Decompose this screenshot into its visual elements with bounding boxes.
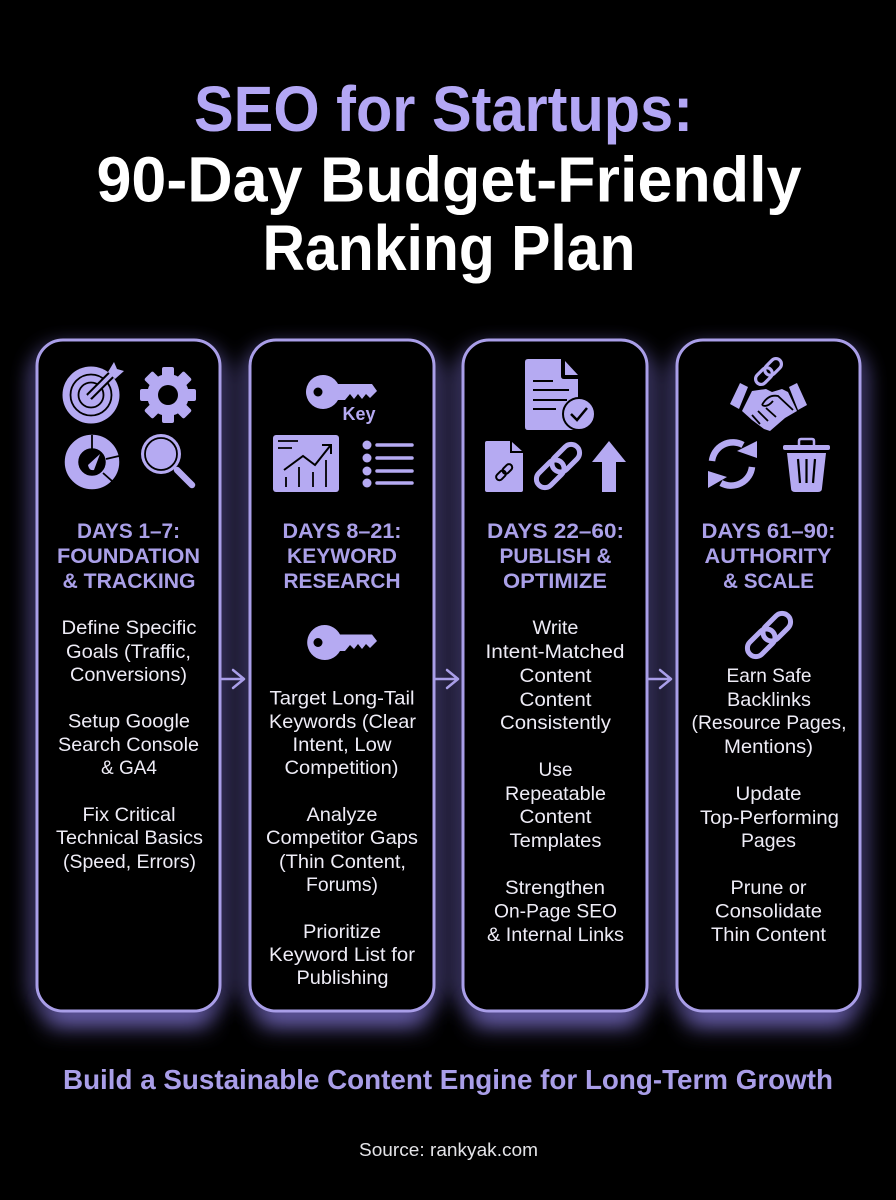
heading: days 22-60: OPTIMIZE <box>503 569 607 593</box>
text: days 8-21 tasks: Publishing <box>296 967 388 989</box>
text: days 61-90 tasks: Top-Performing <box>700 807 839 829</box>
icon: chain link <box>533 441 583 491</box>
text: days 8-21 tasks: Analyze <box>306 804 378 826</box>
heading: days 8-21: RESEARCH <box>284 569 400 593</box>
icon: document with check <box>525 359 595 430</box>
heading: days 61-90: & SCALE <box>723 569 814 593</box>
text: days 22-60 tasks: Consistently <box>500 712 611 734</box>
heading: days 22-60 <box>487 519 624 593</box>
text: days 22-60 tasks: Strengthen <box>505 877 605 899</box>
icon: up arrow <box>592 441 626 492</box>
text: days 1-7 tasks: Define Specific <box>62 617 197 639</box>
icon: document with link <box>485 441 523 492</box>
text: days 1-7 tasks: Goals (Traffic, <box>66 641 191 663</box>
heading: days 61-90: AUTHORITY <box>704 544 832 568</box>
text: days 61-90 tasks: Backlinks <box>727 689 811 711</box>
panel: days 22-60 <box>463 340 647 1011</box>
icon: gauge donut <box>72 435 119 482</box>
text: days 22-60 tasks: On-Page SEO <box>494 900 617 922</box>
source: Source: rankyak.com <box>359 1140 538 1160</box>
text: days 1-7 tasks: Fix Critical <box>82 804 176 826</box>
text: days 1-7 tasks: Setup Google <box>68 710 190 732</box>
text: days 61-90 tasks: (Resource Pages, <box>692 712 846 734</box>
icon: analytics chart <box>273 435 339 492</box>
text: days 8-21 tasks: Competition) <box>284 757 398 779</box>
heading: days 1-7: DAYS 1–7: <box>77 519 180 543</box>
text: days 8-21 tasks: Keywords (Clear <box>269 711 417 733</box>
text: days 61-90 tasks: Consolidate <box>715 900 822 922</box>
text: days 22-60 tasks <box>486 617 624 946</box>
panel: days 8-21 <box>250 340 434 1011</box>
text: days 22-60 tasks: Content <box>520 689 592 711</box>
text: days 61-90 tasks <box>692 665 846 946</box>
text: days 1-7 tasks: (Speed, Errors) <box>63 851 196 873</box>
text: days 22-60 tasks: & Internal Links <box>487 924 624 946</box>
text: days 22-60 tasks: Intent-Matched <box>486 641 624 663</box>
text: days 22-60 tasks: Content <box>520 665 592 687</box>
title: SEO for Startups: <box>194 73 693 145</box>
text: days 61-90 tasks: Update <box>736 783 802 805</box>
icon: refresh arrows <box>708 441 757 488</box>
icon: chain link <box>744 610 794 660</box>
heading: days 8-21: DAYS 8–21: <box>282 519 402 543</box>
text: days 61-90 tasks: Thin Content <box>711 924 827 946</box>
tagline: Build a Sustainable Content Engine for Long-Term Growth <box>63 1064 833 1095</box>
panel: days 61-90 <box>677 340 860 1011</box>
text: days 8-21 tasks: Prioritize <box>303 921 381 943</box>
text: days 8-21 tasks: Competitor Gaps <box>266 827 418 849</box>
icon: key <box>307 625 377 660</box>
icon: gear <box>140 367 196 423</box>
text: days 8-21 tasks: Intent, Low <box>292 734 392 756</box>
text: days 8-21 tasks: Target Long-Tail <box>270 688 414 710</box>
heading: days 61-90: DAYS 61–90: <box>702 519 836 543</box>
heading: days 1-7 <box>57 519 200 593</box>
icon: small chain link <box>753 356 784 387</box>
text: days 1-7 tasks: Conversions) <box>70 664 187 686</box>
text: days 61-90 tasks: Mentions) <box>724 736 813 758</box>
text: days 61-90 tasks: Earn Safe <box>726 665 812 687</box>
icon: key with label: Key <box>342 404 376 424</box>
text: days 8-21 tasks: (Thin Content, <box>279 851 406 873</box>
text: days 1-7 tasks: Technical Basics <box>56 827 203 849</box>
text: days 1-7 tasks: Search Console <box>58 734 199 756</box>
arrow: step 3 to 4 <box>648 670 671 688</box>
text: days 8-21 tasks: Forums) <box>306 874 378 896</box>
icon: trash can <box>783 439 830 492</box>
text: days 61-90 tasks: Pages <box>741 830 796 852</box>
text: days 8-21 tasks: Keyword List for <box>269 944 416 966</box>
title: Ranking Plan <box>262 212 636 284</box>
heading: days 61-90 <box>702 519 836 593</box>
heading: days 22-60: DAYS 22–60: <box>487 519 624 543</box>
heading: days 1-7: & TRACKING <box>62 569 196 593</box>
heading: days 22-60: PUBLISH & <box>500 544 612 568</box>
icon: handshake <box>730 383 807 431</box>
text: days 22-60 tasks: Write <box>532 617 578 639</box>
panel glow <box>37 352 860 1026</box>
icon: key with label <box>306 375 377 424</box>
arrow: step 2 to 3 <box>435 670 458 688</box>
icon: target <box>62 362 124 424</box>
text: days 61-90 tasks: Prune or <box>730 877 807 899</box>
heading: days 1-7: FOUNDATION <box>57 544 200 568</box>
panel: days 1-7 <box>37 340 220 1011</box>
icon: list <box>362 440 412 488</box>
heading: days 8-21: KEYWORD <box>287 544 397 568</box>
text: days 22-60 tasks: Repeatable <box>505 783 606 805</box>
title: 90-Day Budget-Friendly <box>96 144 802 216</box>
text: days 1-7 tasks <box>56 617 203 873</box>
text: days 22-60 tasks: Content <box>520 806 592 828</box>
text: days 22-60 tasks: Use <box>538 759 572 781</box>
text: days 1-7 tasks: & GA4 <box>101 757 157 779</box>
heading: days 8-21 <box>282 519 402 593</box>
icon: magnifier <box>141 434 192 485</box>
title <box>96 73 802 284</box>
text: days 8-21 tasks <box>266 688 418 989</box>
arrow: step 1 to 2 <box>221 670 244 688</box>
text: days 22-60 tasks: Templates <box>510 830 602 852</box>
